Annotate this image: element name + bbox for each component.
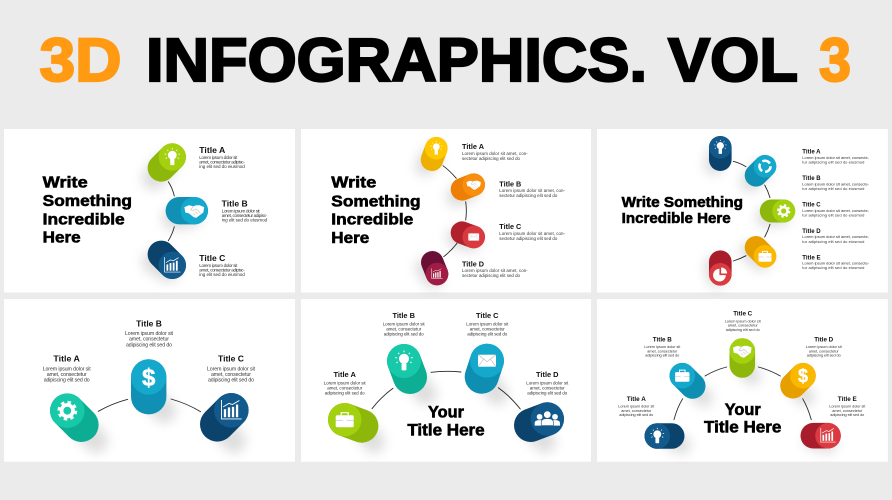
text: title B: Lorem ipsum dolor sit — [644, 345, 681, 349]
text: title A: amet, consectetur — [47, 372, 87, 378]
text: title A: Lorem ipsum dolor sit amet, consecte- — [802, 155, 870, 160]
capsule D: dollar: $ — [798, 366, 808, 386]
heading: write something — [622, 195, 743, 227]
text: title C: Title C — [218, 353, 244, 363]
text: title A: adipiscing elit sed do — [44, 378, 90, 384]
title: infographics: INFOGRAPHICS. — [146, 26, 647, 94]
heading: write something: Write Something — [622, 195, 743, 211]
text: title B: Title B — [499, 180, 522, 189]
capsule D: briefcase — [750, 245, 776, 268]
heading: write something: Something — [43, 193, 132, 210]
text: title C: amet, consectetur adipisc- — [199, 268, 245, 273]
heading: your title here: Title Here — [407, 422, 485, 440]
text: title D: adipiscing elit sed do — [807, 354, 841, 358]
text: title D — [806, 336, 843, 358]
text: title E: Title E — [802, 254, 821, 261]
text: title B: amet, consectetur — [129, 337, 169, 343]
text: title D — [462, 259, 528, 278]
capsule C: chart — [154, 252, 186, 279]
text: title B: Lorem ipsum dolor sit — [383, 322, 425, 327]
text: title B: adipiscing elit sed do — [126, 342, 172, 348]
text: title C: Lorem ipsum dolor sit amet, consecte- — [802, 208, 870, 213]
capsule A: bulb — [154, 143, 186, 178]
text: title D: Title D — [802, 228, 821, 235]
text: title A: Title A — [199, 145, 225, 155]
heading: write something: Write — [43, 174, 88, 191]
text: title A — [324, 370, 366, 396]
connector arcs — [443, 166, 466, 257]
text: title A: Title A — [802, 149, 821, 156]
connector arcs — [733, 161, 770, 261]
panel: three vertical steps, green blue navy — [4, 129, 295, 292]
text: title A: Lorem ipsum dolor sit — [618, 405, 655, 409]
text: title E: Title E — [838, 396, 857, 403]
text: title C — [466, 311, 509, 336]
text: title D — [802, 228, 870, 244]
text: title A: amet, consectetur — [327, 386, 363, 390]
capsule C: mail — [470, 344, 504, 394]
text: title C: Lorem ipsum dolor sit amet, con- — [499, 231, 566, 236]
capsule E: pie — [709, 262, 732, 286]
text: title B — [802, 175, 870, 191]
text: title A: Lorem ipsum dolor sit — [199, 155, 238, 160]
text: title B: amet, consectetur adipisc- — [222, 213, 268, 218]
text: title A: Lorem ipsum dolor sit — [43, 366, 91, 372]
capsule B: handshake — [174, 197, 208, 224]
capsule D: dollar — [790, 363, 816, 397]
text: title C: Lorem ipsum dolor sit — [207, 366, 256, 372]
text: title C — [207, 353, 256, 384]
text: title C: Title C — [802, 202, 821, 209]
text: title C: Lorem ipsum dolor sit — [466, 322, 509, 327]
text: title D: amet, consectetur — [809, 349, 839, 353]
text: title A: ing elit sed do eiusmod — [199, 164, 245, 169]
text: title A: Title A — [53, 353, 80, 363]
text: title B: tur adipiscing elit sed do eiusmod — [802, 186, 864, 191]
heading: write something: Incredible — [43, 211, 125, 228]
connector arcs — [372, 371, 520, 409]
text: title A: Title A — [333, 370, 357, 379]
text: title B: Title B — [136, 318, 162, 328]
text: title D: tur adipiscing elit sed do eiusmod — [802, 239, 864, 244]
text: title E: amet, consectetur — [832, 409, 863, 413]
capsule B: briefcase — [670, 363, 704, 398]
text: title B: Lorem ipsum dolor sit — [125, 331, 174, 337]
capsule B: dollar — [131, 359, 166, 411]
text: title C: Lorem ipsum dolor sit — [199, 263, 238, 268]
text: title B: sectetur adipiscing elit sed do — [499, 193, 558, 198]
text: title C: Title C — [499, 222, 522, 231]
text: title D: Title D — [462, 259, 485, 268]
text: title C: Lorem ipsum dolor sit — [725, 319, 762, 323]
text: title B: adipiscing elit sed do — [384, 331, 424, 336]
text: title B: Title B — [222, 198, 248, 208]
capsule B: cycle — [750, 155, 776, 182]
text: title B: adipiscing elit sed do — [645, 354, 679, 358]
text: title C: Title C — [199, 253, 225, 263]
capsule B: dollar: $ — [142, 364, 156, 392]
text: title C: amet, consectetur — [211, 372, 251, 378]
heading: write something: Incredible — [331, 212, 413, 229]
text: title B — [644, 336, 681, 358]
capsule A: bulb — [425, 137, 448, 166]
text: title C: amet, consectetur — [470, 326, 505, 332]
text: title E: tur adipiscing elit sed do eiusmod — [802, 265, 864, 270]
text: title B: amet, consectetur — [647, 349, 678, 353]
capsule B: bulb — [387, 344, 426, 394]
panel: four steps arch — [301, 299, 591, 462]
text: title C: Title C — [733, 311, 752, 318]
text: title C: adipiscing elit sed do — [467, 331, 508, 336]
connector arcs — [168, 182, 174, 241]
text: title C — [499, 222, 566, 241]
text: title E: adipiscing elit sed do — [830, 413, 864, 417]
text: title D: Title D — [536, 370, 559, 379]
text: title A — [618, 396, 655, 417]
text: title B: Title B — [653, 336, 672, 343]
heading: write something: Write — [331, 175, 376, 192]
panel: three steps arch — [4, 299, 295, 462]
text: title A — [802, 149, 870, 165]
text: title C: tur adipiscing elit sed do eiusmod — [802, 212, 864, 217]
connector arcs — [674, 367, 811, 420]
text: title C: sectetur adipiscing elit sed do — [499, 236, 558, 241]
text: title C — [725, 311, 762, 332]
heading: write something: Something — [331, 193, 421, 210]
text: title E — [802, 254, 870, 270]
text: title E — [829, 396, 866, 417]
text: title A: Lorem ipsum dolor sit amet, con- — [462, 151, 528, 156]
heading: your title here — [407, 404, 485, 440]
panel: five steps arch — [597, 299, 888, 462]
text: title A — [199, 145, 245, 169]
text: title A: Lorem ipsum dolor sit — [324, 380, 366, 386]
text: title B — [499, 180, 566, 198]
capsule D: chart — [425, 262, 448, 285]
panel: four vertical steps, yellow orange red maroon — [301, 129, 591, 292]
text: title B: Title B — [392, 311, 416, 320]
text: title D — [526, 370, 569, 396]
text: title B: ing elit sed do eiusmod — [222, 218, 268, 223]
capsule B: handshake — [456, 173, 485, 197]
heading: write something — [331, 175, 421, 247]
heading: your title here: Your — [725, 401, 761, 419]
capsule D: people — [531, 402, 564, 442]
text: title A: sectetur adipiscing elit sed do — [462, 156, 521, 161]
capsule E: chart — [813, 423, 841, 449]
text: title B: amet, consectetur — [386, 326, 422, 332]
text: title C: adipiscing elit sed do — [726, 328, 760, 332]
text: title D: Lorem ipsum dolor sit amet, consecte- — [802, 234, 870, 239]
text: title D: amet, consectetur — [530, 386, 565, 390]
text: title B: Title B — [802, 175, 821, 182]
title: vol: VOL — [668, 26, 798, 94]
title: 3D: 3D — [40, 26, 122, 94]
text: title A: Title A — [627, 396, 646, 403]
text: title A — [462, 142, 528, 161]
text: title C: ing elit sed do eiusmod — [199, 272, 245, 277]
heading: your title here: Title Here — [704, 419, 781, 437]
text: title D: sectetur adipiscing elit sed do — [462, 273, 521, 278]
text: title B — [383, 311, 425, 336]
heading: write something: Here — [331, 230, 369, 247]
text: title D: Lorem ipsum dolor sit amet, con- — [462, 268, 528, 273]
text: title A: amet, consectetur — [621, 409, 652, 413]
text: title D: Lorem ipsum dolor sit — [526, 380, 569, 386]
text: title B: Lorem ipsum dolor sit — [222, 208, 260, 214]
text: title C: Title C — [476, 311, 499, 320]
capsule A: bulb — [644, 423, 682, 449]
heading: write something: Here — [43, 230, 81, 247]
text: title B: Lorem ipsum dolor sit amet, consecte- — [802, 181, 870, 186]
text: title C — [199, 253, 245, 277]
text: title A: tur adipiscing elit sed do eiusmod — [802, 160, 864, 165]
panel: five steps on an arc with list at right — [597, 129, 888, 292]
capsule A: briefcase — [328, 403, 374, 442]
heading: your title here — [704, 401, 781, 437]
text: title A — [43, 353, 91, 384]
heading: write something — [43, 174, 132, 247]
text: title D: adipiscing elit sed do — [527, 390, 568, 396]
capsule C: gear — [766, 200, 795, 222]
text: title A: adipiscing elit sed do — [619, 413, 653, 417]
text: title B — [125, 318, 174, 348]
text: title C: amet, consectetur — [728, 324, 758, 328]
capsule C: handshake — [730, 338, 755, 376]
text: title B: Lorem ipsum dolor sit amet, con- — [499, 188, 566, 193]
text: title D: Title D — [814, 336, 833, 343]
capsule C: mail — [456, 226, 485, 248]
capsule A: bulb — [709, 136, 732, 165]
text: title C: adipiscing elit sed do — [208, 378, 254, 384]
text: title D: Lorem ipsum dolor sit — [806, 345, 843, 349]
heading: your title here: Your — [428, 404, 465, 422]
connector arcs — [98, 399, 201, 412]
heading: write something: Incredible Here — [622, 211, 731, 227]
text: title E: Lorem ipsum dolor sit — [829, 405, 866, 409]
capsule A: gear — [50, 393, 96, 441]
title — [40, 26, 851, 94]
text: title B — [222, 198, 268, 223]
text: title A: amet, consectetur adipisc- — [199, 160, 245, 164]
text: title E: Lorem ipsum dolor sit amet, consecte- — [802, 261, 870, 266]
text: title C — [802, 202, 870, 217]
text: title A: adipiscing elit sed do — [325, 390, 365, 396]
title: 3: 3 — [819, 26, 851, 94]
capsule C: chart — [214, 393, 249, 441]
text: title A: Title A — [462, 142, 485, 151]
